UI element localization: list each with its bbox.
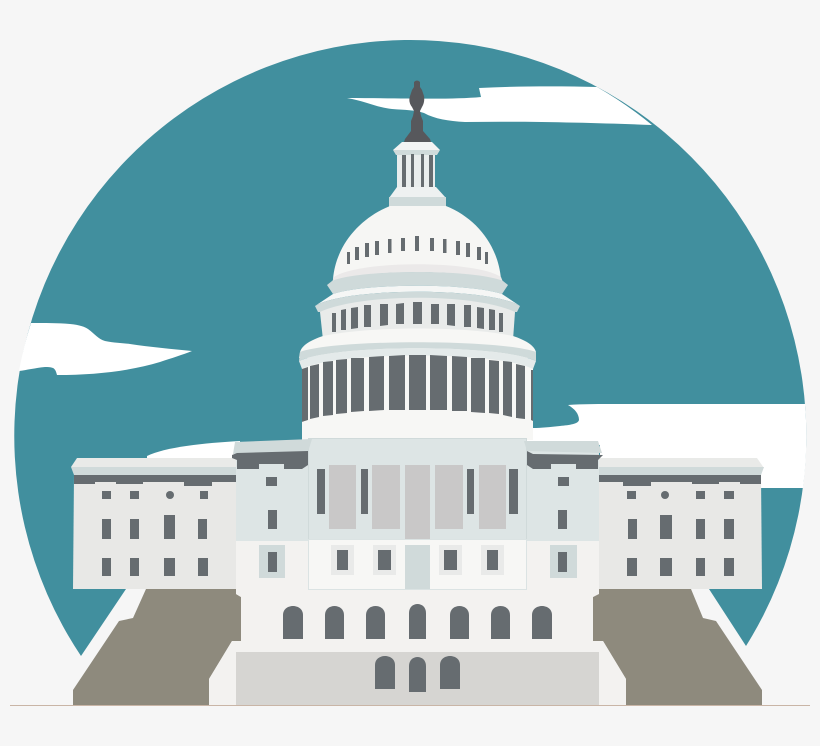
dome windows	[347, 236, 488, 264]
colonnade windows	[302, 355, 533, 422]
lower building	[209, 540, 626, 705]
right wing	[599, 458, 764, 589]
ground line	[10, 705, 810, 706]
teal sky circle	[14, 40, 806, 656]
arched windows: plinth row	[375, 656, 460, 692]
portico columns panels	[329, 465, 506, 539]
cloud: left	[19, 323, 192, 375]
portico dark slits	[317, 469, 518, 514]
central portico	[308, 438, 526, 590]
left brown stairs	[73, 589, 241, 705]
cloud: behind left wing	[147, 441, 240, 460]
cloud: right	[520, 404, 806, 488]
main drum ring	[299, 328, 536, 358]
right wing windows	[627, 491, 734, 576]
statue on top of dome	[404, 80, 431, 142]
plinth	[236, 652, 599, 705]
portico lower windows	[331, 545, 504, 575]
dome cap	[333, 206, 501, 279]
right tower	[524, 441, 603, 578]
arched windows: main row	[283, 604, 552, 639]
portico door	[405, 545, 430, 589]
right brown stairs	[593, 589, 762, 705]
dome	[299, 80, 536, 440]
upper ring bands	[315, 264, 520, 340]
right wing cornice	[599, 475, 761, 486]
left tower	[232, 439, 312, 578]
lantern	[389, 142, 446, 207]
drum base	[302, 412, 533, 440]
left wing	[71, 458, 236, 589]
colonnade white columns	[302, 356, 533, 424]
drum ring band	[299, 342, 536, 361]
left wing cornice	[74, 475, 236, 486]
cloud: top	[347, 86, 652, 125]
colonnade backing	[299, 348, 536, 424]
upper drum windows	[332, 302, 503, 332]
left wing windows	[102, 491, 208, 576]
